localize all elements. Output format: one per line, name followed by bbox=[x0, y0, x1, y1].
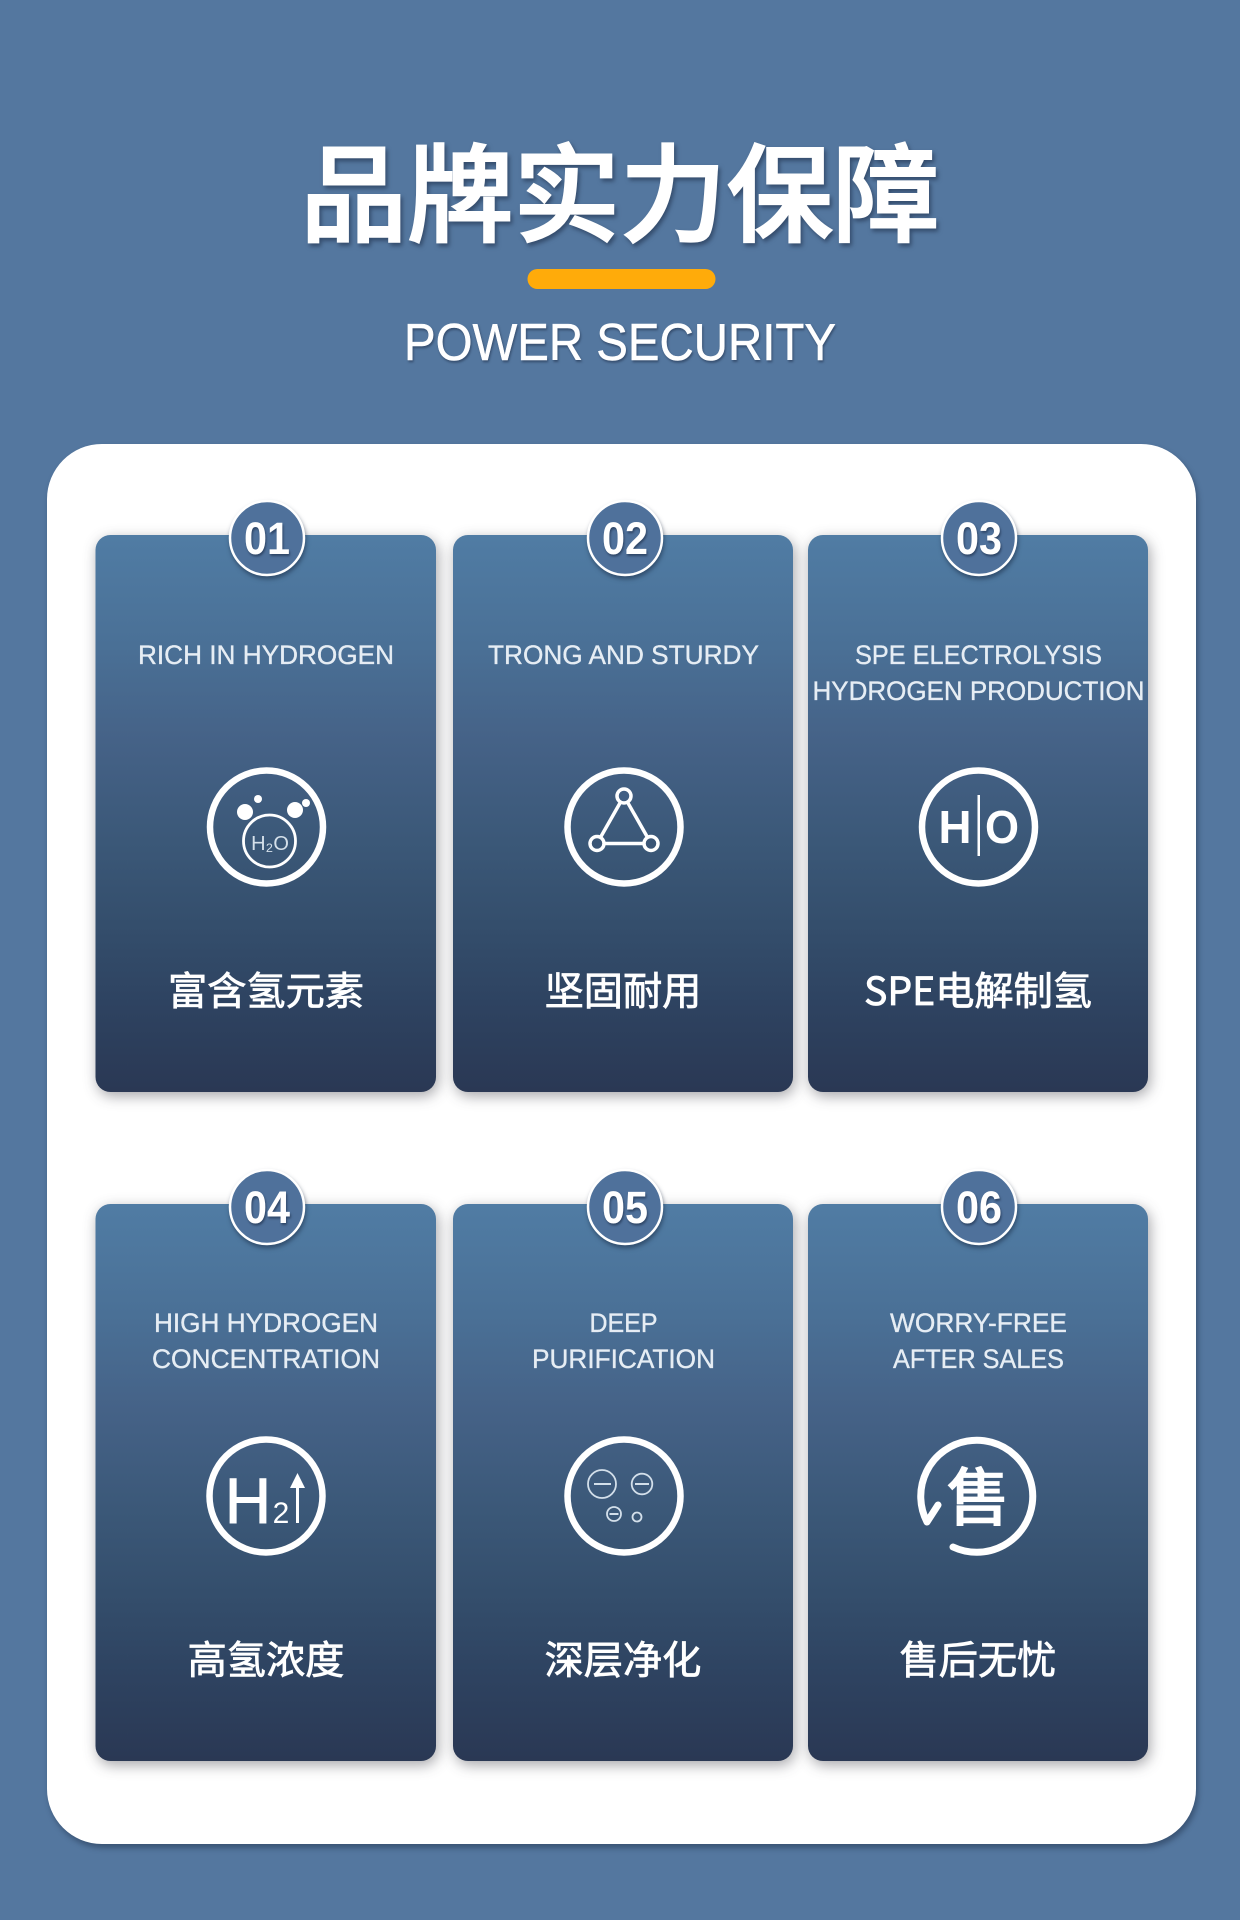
card 03: SPE electrolysis: HYDROGEN PRODUCTION bbox=[812, 676, 1144, 706]
icon: H2O bubbles: H₂O bbox=[251, 833, 289, 855]
card 06: after sales: AFTER SALES bbox=[893, 1344, 1064, 1374]
badge 04 bbox=[230, 1170, 304, 1244]
icon: purification particles bbox=[568, 1440, 680, 1552]
panel: white container bbox=[47, 444, 1196, 1844]
chinese label 05: 深层净化 bbox=[545, 1630, 701, 1686]
card 02: strong and sturdy bbox=[453, 501, 793, 1092]
badge 01 bbox=[230, 501, 304, 575]
chinese label 06: 售后无忧 bbox=[900, 1630, 1056, 1686]
badge 03: 03 bbox=[956, 513, 1002, 564]
badge 05: 05 bbox=[602, 1182, 648, 1233]
orange accent bar bbox=[528, 269, 716, 289]
title: 品牌实力保障 bbox=[300, 109, 940, 264]
english label 02: TRONG AND STURDY bbox=[488, 640, 759, 670]
card 04: high concentration bbox=[96, 1170, 436, 1761]
badge 06: 06 bbox=[956, 1182, 1002, 1233]
card 04: high concentration: CONCENTRATION bbox=[152, 1344, 380, 1374]
chinese label 04: 高氢浓度 bbox=[188, 1630, 344, 1686]
icon: H|O: O bbox=[985, 801, 1019, 853]
english label 06: WORRY-FREE bbox=[890, 1308, 1067, 1338]
card 05: deep purification bbox=[453, 1170, 793, 1761]
english label 05: DEEP bbox=[590, 1308, 658, 1338]
english label 01: RICH IN HYDROGEN bbox=[138, 640, 394, 670]
badge 02 bbox=[588, 501, 662, 575]
icon: H|O: H bbox=[938, 801, 972, 853]
icon: H2O bubbles bbox=[210, 770, 323, 884]
english label 04: HIGH HYDROGEN bbox=[154, 1308, 378, 1338]
badge 01: 01 bbox=[244, 513, 290, 564]
icon: H2 up arrow: 2 bbox=[273, 1497, 289, 1530]
badge 03 bbox=[942, 501, 1016, 575]
icon: H|O bbox=[922, 770, 1035, 884]
badge 06 bbox=[942, 1170, 1016, 1244]
card 05: deep purification: PURIFICATION bbox=[532, 1344, 715, 1374]
badge 02: 02 bbox=[602, 513, 648, 564]
card 06: after sales bbox=[808, 1170, 1148, 1761]
icon: after-sale cycle: 售 bbox=[946, 1448, 1010, 1539]
badge 05 bbox=[588, 1170, 662, 1244]
english label 03: SPE ELECTROLYSIS bbox=[855, 640, 1102, 670]
chinese label 01: 富含氢元素 bbox=[168, 961, 364, 1017]
icon: after-sale cycle bbox=[921, 1440, 1033, 1552]
icon: triangle nodes bbox=[568, 770, 680, 884]
card 03: SPE electrolysis bbox=[808, 501, 1148, 1092]
chinese label 02: 坚固耐用 bbox=[545, 961, 701, 1017]
icon: H2 up arrow: H bbox=[225, 1465, 271, 1537]
badge 04: 04 bbox=[244, 1182, 290, 1233]
chinese label 03: SPE电解制氢 bbox=[864, 961, 1092, 1017]
subtitle: POWER SECURITY bbox=[404, 314, 836, 372]
icon: H2 up arrow bbox=[210, 1440, 322, 1552]
card 01: rich in hydrogen bbox=[96, 501, 436, 1092]
